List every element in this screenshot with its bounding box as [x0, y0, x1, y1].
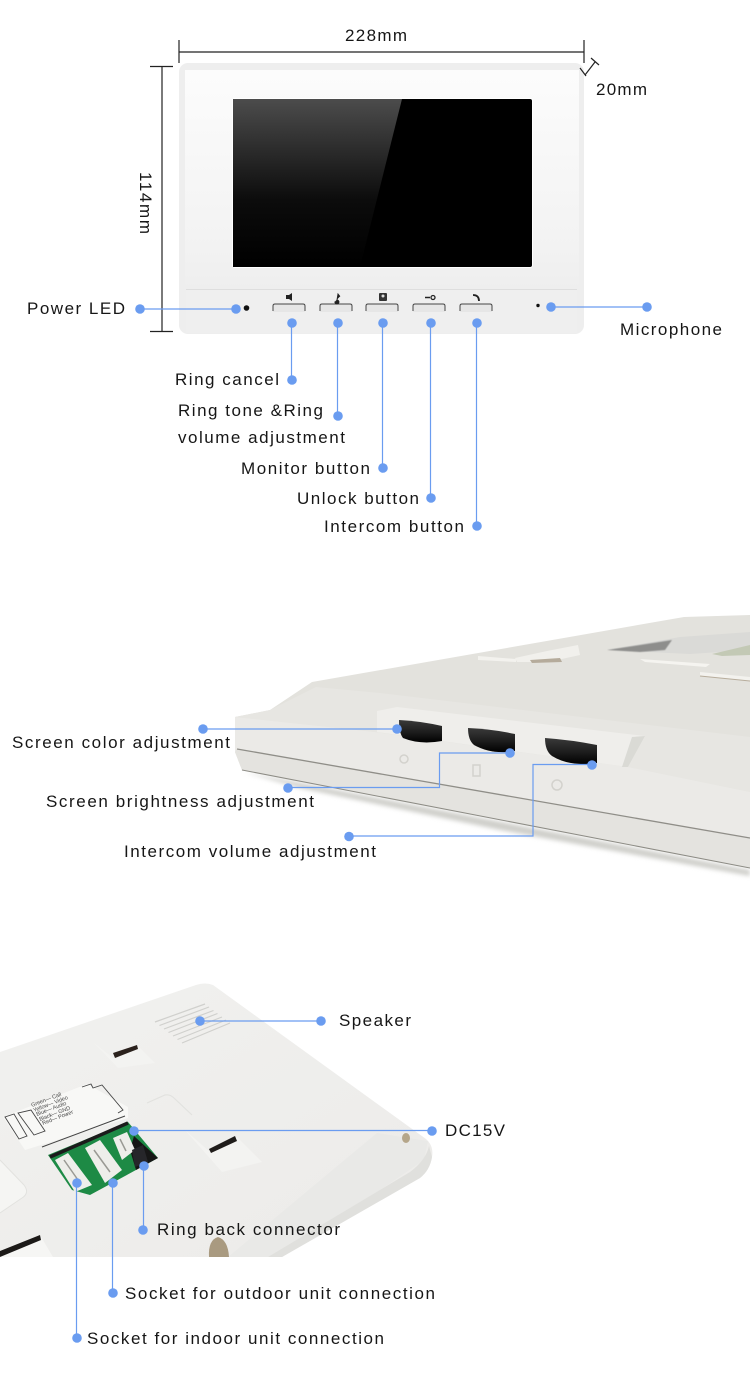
callout: Screen brightness adjustment: Screen brightness adjustment [46, 792, 314, 811]
callout: Screen brightness adjustment [46, 748, 515, 811]
adjustment wheel 2 [468, 728, 515, 752]
wiring label sticker [3, 1084, 128, 1150]
microphone hole [536, 304, 540, 307]
callout: Socket for outdoor unit connection: Socket for outdoor unit connection [125, 1284, 435, 1303]
bottom edge [242, 770, 750, 868]
device back [0, 984, 432, 1257]
embossed marks [400, 755, 562, 790]
lower left slot [0, 1235, 53, 1257]
callout: Socket for indoor unit connection [72, 1178, 384, 1348]
panel: side view of monitor [235, 615, 750, 876]
dimension: height 114mm: 114mm [136, 172, 155, 234]
callout: Unlock button [297, 318, 436, 508]
callout: DC15V [129, 1121, 506, 1140]
dimension: depth 20mm [580, 58, 647, 99]
adjustment wheel 3 [545, 738, 597, 764]
wiring label sticker: Red— Power [42, 1109, 74, 1127]
dimension: depth 20mm: 20mm [596, 80, 647, 99]
lower front face [235, 749, 750, 868]
callout: Power LED: Power LED [27, 299, 125, 318]
wiring label sticker: Yellow— Video [33, 1095, 69, 1114]
panel: rear view of monitor [0, 984, 432, 1257]
callout: Speaker [195, 1011, 411, 1030]
callout: Monitor button: Monitor button [241, 459, 370, 478]
dimension: width 228mm [179, 26, 584, 63]
callout: Socket for indoor unit connection: Socket for indoor unit connection [87, 1329, 384, 1348]
device body side [235, 615, 750, 868]
callout: Intercom button: Intercom button [324, 517, 464, 536]
mount slot 1 [113, 1045, 138, 1058]
callout: Ring back connector: Ring back connector [157, 1220, 340, 1239]
mount recess 1 [93, 1042, 155, 1068]
corner screw bottom [209, 1237, 229, 1257]
callout: Speaker: Speaker [339, 1011, 411, 1030]
callout: Screen color adjustment: Screen color adjustment [12, 733, 230, 752]
callout: Microphone [546, 302, 722, 339]
dimension: width 228mm: 228mm [345, 26, 407, 45]
speaker grille [155, 1004, 230, 1043]
top surface details [478, 632, 750, 681]
control ledge [377, 707, 645, 767]
device body front [179, 63, 584, 334]
connector opening with circuit board [48, 1122, 158, 1195]
shadow under device [244, 772, 750, 876]
wiring label sticker: Green— Call [31, 1092, 62, 1109]
power LED hole [244, 305, 249, 311]
left mount recess [0, 1160, 27, 1213]
callout: Screen color adjustment [12, 724, 402, 752]
adjustment wheel 1 [399, 720, 442, 742]
panel: front view of monitor [179, 63, 584, 334]
wiring label sticker: Black— GND [39, 1106, 71, 1123]
callout: Microphone: Microphone [620, 320, 722, 339]
callout: Ring tone and volume adjustment: Ring tone &Ring [178, 401, 323, 420]
screen [232, 98, 533, 268]
wiring label sticker: Blue— Audio [36, 1101, 67, 1118]
lower facet [228, 1133, 428, 1257]
lower left slot opening [0, 1235, 41, 1257]
corner screw top [402, 1133, 410, 1143]
mount recess 2 [185, 1130, 262, 1172]
callout: Intercom volume adjustment: Intercom volume adjustment [124, 842, 376, 861]
lower rim [268, 1146, 432, 1257]
mount recess 3 [147, 1095, 192, 1115]
callout: Unlock button: Unlock button [297, 489, 419, 508]
callout: Intercom button [324, 318, 482, 536]
callout: Ring cancel: Ring cancel [175, 370, 279, 389]
callout: Ring tone and volume adjustment: volume adjustment [178, 428, 345, 447]
callout: Ring cancel [175, 318, 297, 389]
callout: Socket for outdoor unit connection [108, 1178, 435, 1303]
groove [237, 749, 750, 838]
callout: Intercom volume adjustment [124, 760, 597, 861]
chamfer along the edge [235, 687, 750, 792]
monitor buttons and icons [273, 293, 492, 312]
callout: DC15V: DC15V [445, 1121, 506, 1140]
dimension: height 114mm [136, 66, 173, 332]
callout: Ring tone and volume adjustment [178, 318, 345, 447]
front face [235, 717, 750, 868]
callout: Power LED [27, 299, 241, 318]
mount slot 2 [209, 1136, 237, 1153]
callout: Ring back connector [138, 1161, 340, 1239]
callout: Monitor button [241, 318, 388, 478]
